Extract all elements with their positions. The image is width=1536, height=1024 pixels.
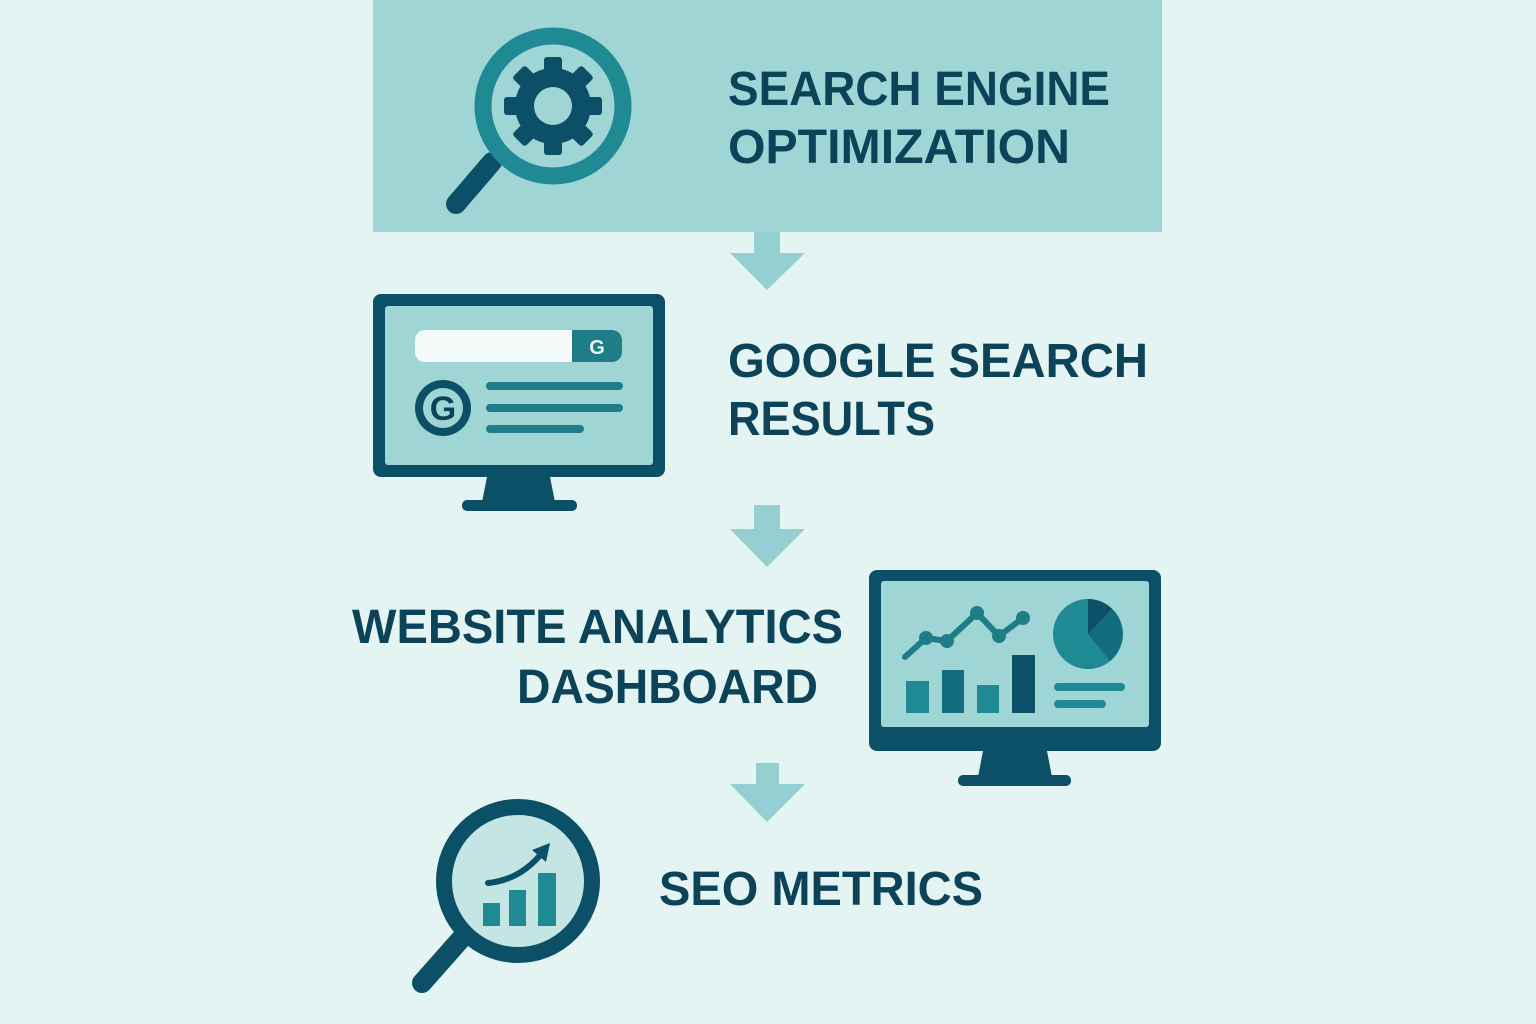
heading: search engine optimization: OPTIMIZATION [728, 121, 1070, 174]
arrow 1 [730, 232, 805, 290]
icon: monitor with google search: G [430, 390, 456, 428]
heading: website analytics dashboard: WEBSITE ANALYTICS [352, 601, 843, 654]
icon: analytics dashboard monitor [869, 570, 1161, 786]
heading: google search results [728, 335, 1148, 446]
icon: magnifier with gear [456, 36, 623, 204]
heading: website analytics dashboard [352, 601, 843, 714]
heading: google search results: GOOGLE SEARCH [728, 335, 1148, 388]
icon: monitor with google search: G [589, 337, 605, 359]
heading: website analytics dashboard: DASHBOARD [517, 661, 818, 714]
heading: search engine optimization [728, 63, 1110, 174]
arrow 3 [730, 763, 805, 822]
icon: monitor with google search [373, 294, 665, 511]
heading: search engine optimization: SEARCH ENGINE [728, 63, 1110, 116]
heading: google search results: RESULTS [728, 393, 935, 446]
icon: magnifier with growth chart [422, 807, 592, 983]
panel: search engine optimization [373, 0, 1162, 232]
heading: seo metrics: SEO METRICS [659, 863, 983, 916]
arrow 2 [730, 505, 805, 567]
